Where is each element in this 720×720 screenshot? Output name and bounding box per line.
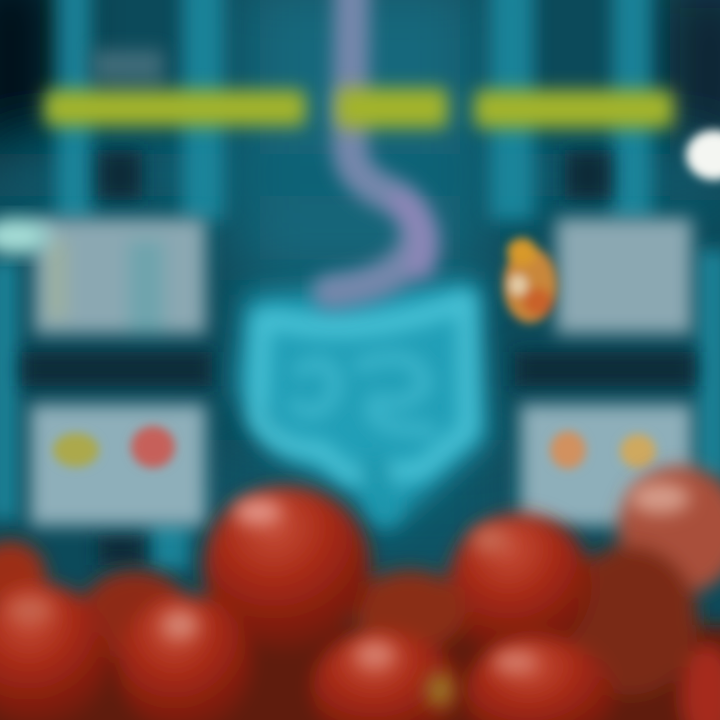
panel: top left card — [34, 218, 206, 335]
icon: right card fruit icons — [550, 431, 656, 469]
panel: bottom right card — [520, 404, 692, 526]
icon: esophagus and stomach — [330, 0, 425, 292]
tomatoes foreground — [0, 466, 720, 720]
icon: pale glow left — [0, 217, 50, 255]
title: blurred yellow heading — [44, 50, 674, 128]
panel: bottom left card — [30, 404, 206, 526]
icon: orange food cluster — [503, 238, 557, 323]
panel: top right card — [556, 218, 692, 334]
tomato highlights — [8, 482, 690, 708]
icon: intestines — [235, 280, 488, 530]
icon: left card fruit icons — [53, 426, 175, 468]
icon: white glow right — [686, 130, 720, 180]
